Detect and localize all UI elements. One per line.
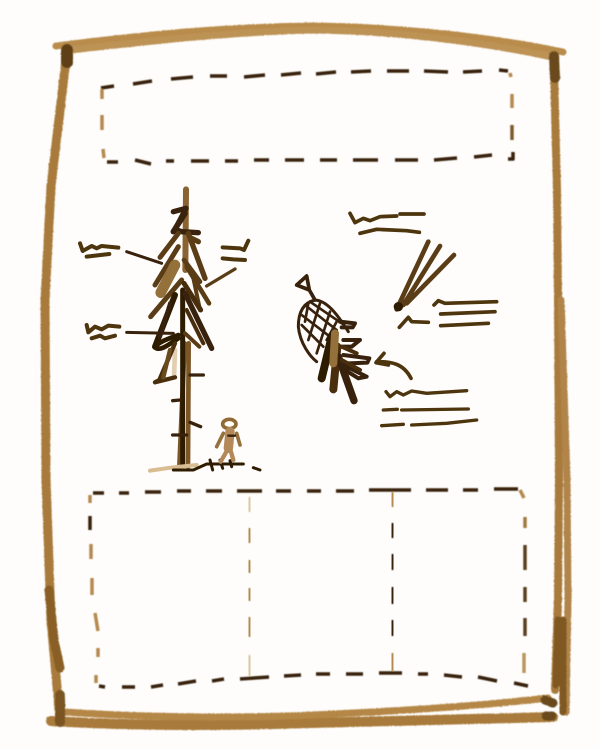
pine cone, needles and labels	[297, 213, 497, 426]
pine needles	[394, 242, 454, 311]
column divider 2	[392, 492, 393, 671]
leader: upper left	[127, 252, 162, 263]
leader: upper right	[207, 269, 235, 286]
person	[217, 419, 240, 462]
arrow to cone	[376, 353, 411, 378]
label: needle text	[434, 301, 497, 326]
leader: lower left	[127, 328, 173, 338]
tree with person and labels	[80, 189, 260, 471]
arrow to needles	[399, 317, 428, 327]
label: cone text	[382, 391, 477, 426]
label: upper left squiggle	[80, 243, 118, 257]
title box dashed outline	[101, 70, 513, 164]
tree trunk	[174, 189, 189, 467]
bottom box dashed outline	[90, 489, 528, 687]
label: lower left squiggle	[87, 325, 119, 338]
tree stubs	[173, 375, 203, 435]
tree branches	[151, 208, 212, 382]
pine cone	[297, 276, 369, 401]
ground	[150, 460, 260, 471]
label: upper right squiggle	[223, 241, 248, 260]
column divider 1	[249, 497, 250, 676]
label: top squiggle	[350, 213, 424, 233]
